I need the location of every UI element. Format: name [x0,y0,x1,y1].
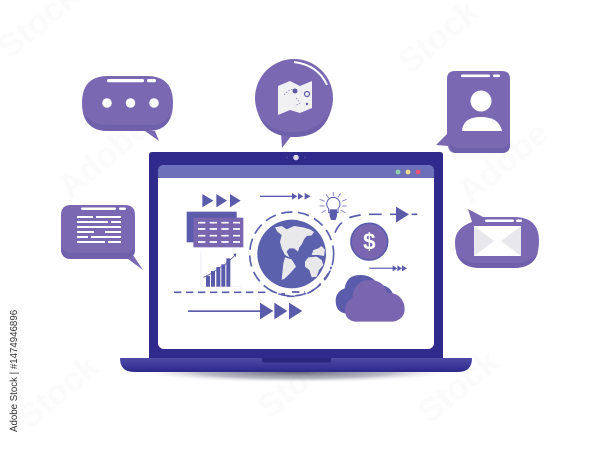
laptop base [120,358,472,372]
trackpad notch [262,358,331,362]
light bulb [320,192,347,220]
watermark: Stock [11,347,106,436]
laptop lid [149,152,443,358]
dollar coin: $ [363,229,376,255]
browser bar [158,165,434,178]
bubble: mail [455,209,539,268]
bubble: contact card [436,71,510,153]
triple arrows top left [202,194,241,207]
watermark: Stock [411,342,506,431]
dollar coin [351,223,388,260]
bubble: chat dots [82,76,173,141]
small arrow right [369,265,407,271]
laptop [120,152,472,383]
bubble: map [255,59,333,148]
window dots [396,170,420,174]
dashed arrow right [335,207,417,233]
webcam [286,155,306,160]
long triple arrow [188,303,302,319]
screen illustrations [174,192,417,322]
clouds [336,275,405,322]
arrow top [260,193,311,200]
watermark: Adobe [451,114,556,211]
watermark: Adobe [51,109,156,206]
side credit text: Adobe Stock | #1474946896 [9,310,20,432]
text lines [77,216,121,243]
table [187,212,243,247]
globe [250,212,334,296]
watermark: Stock [251,337,346,426]
growth chart [201,252,242,287]
icon: folded map [278,81,312,115]
icon: person [462,90,502,131]
icon: envelope [474,226,521,256]
screen [158,165,434,349]
dashed ring [250,212,334,296]
dashed line lower [174,267,331,296]
laptop shadow [136,361,456,383]
bubble: text lines [61,205,143,270]
